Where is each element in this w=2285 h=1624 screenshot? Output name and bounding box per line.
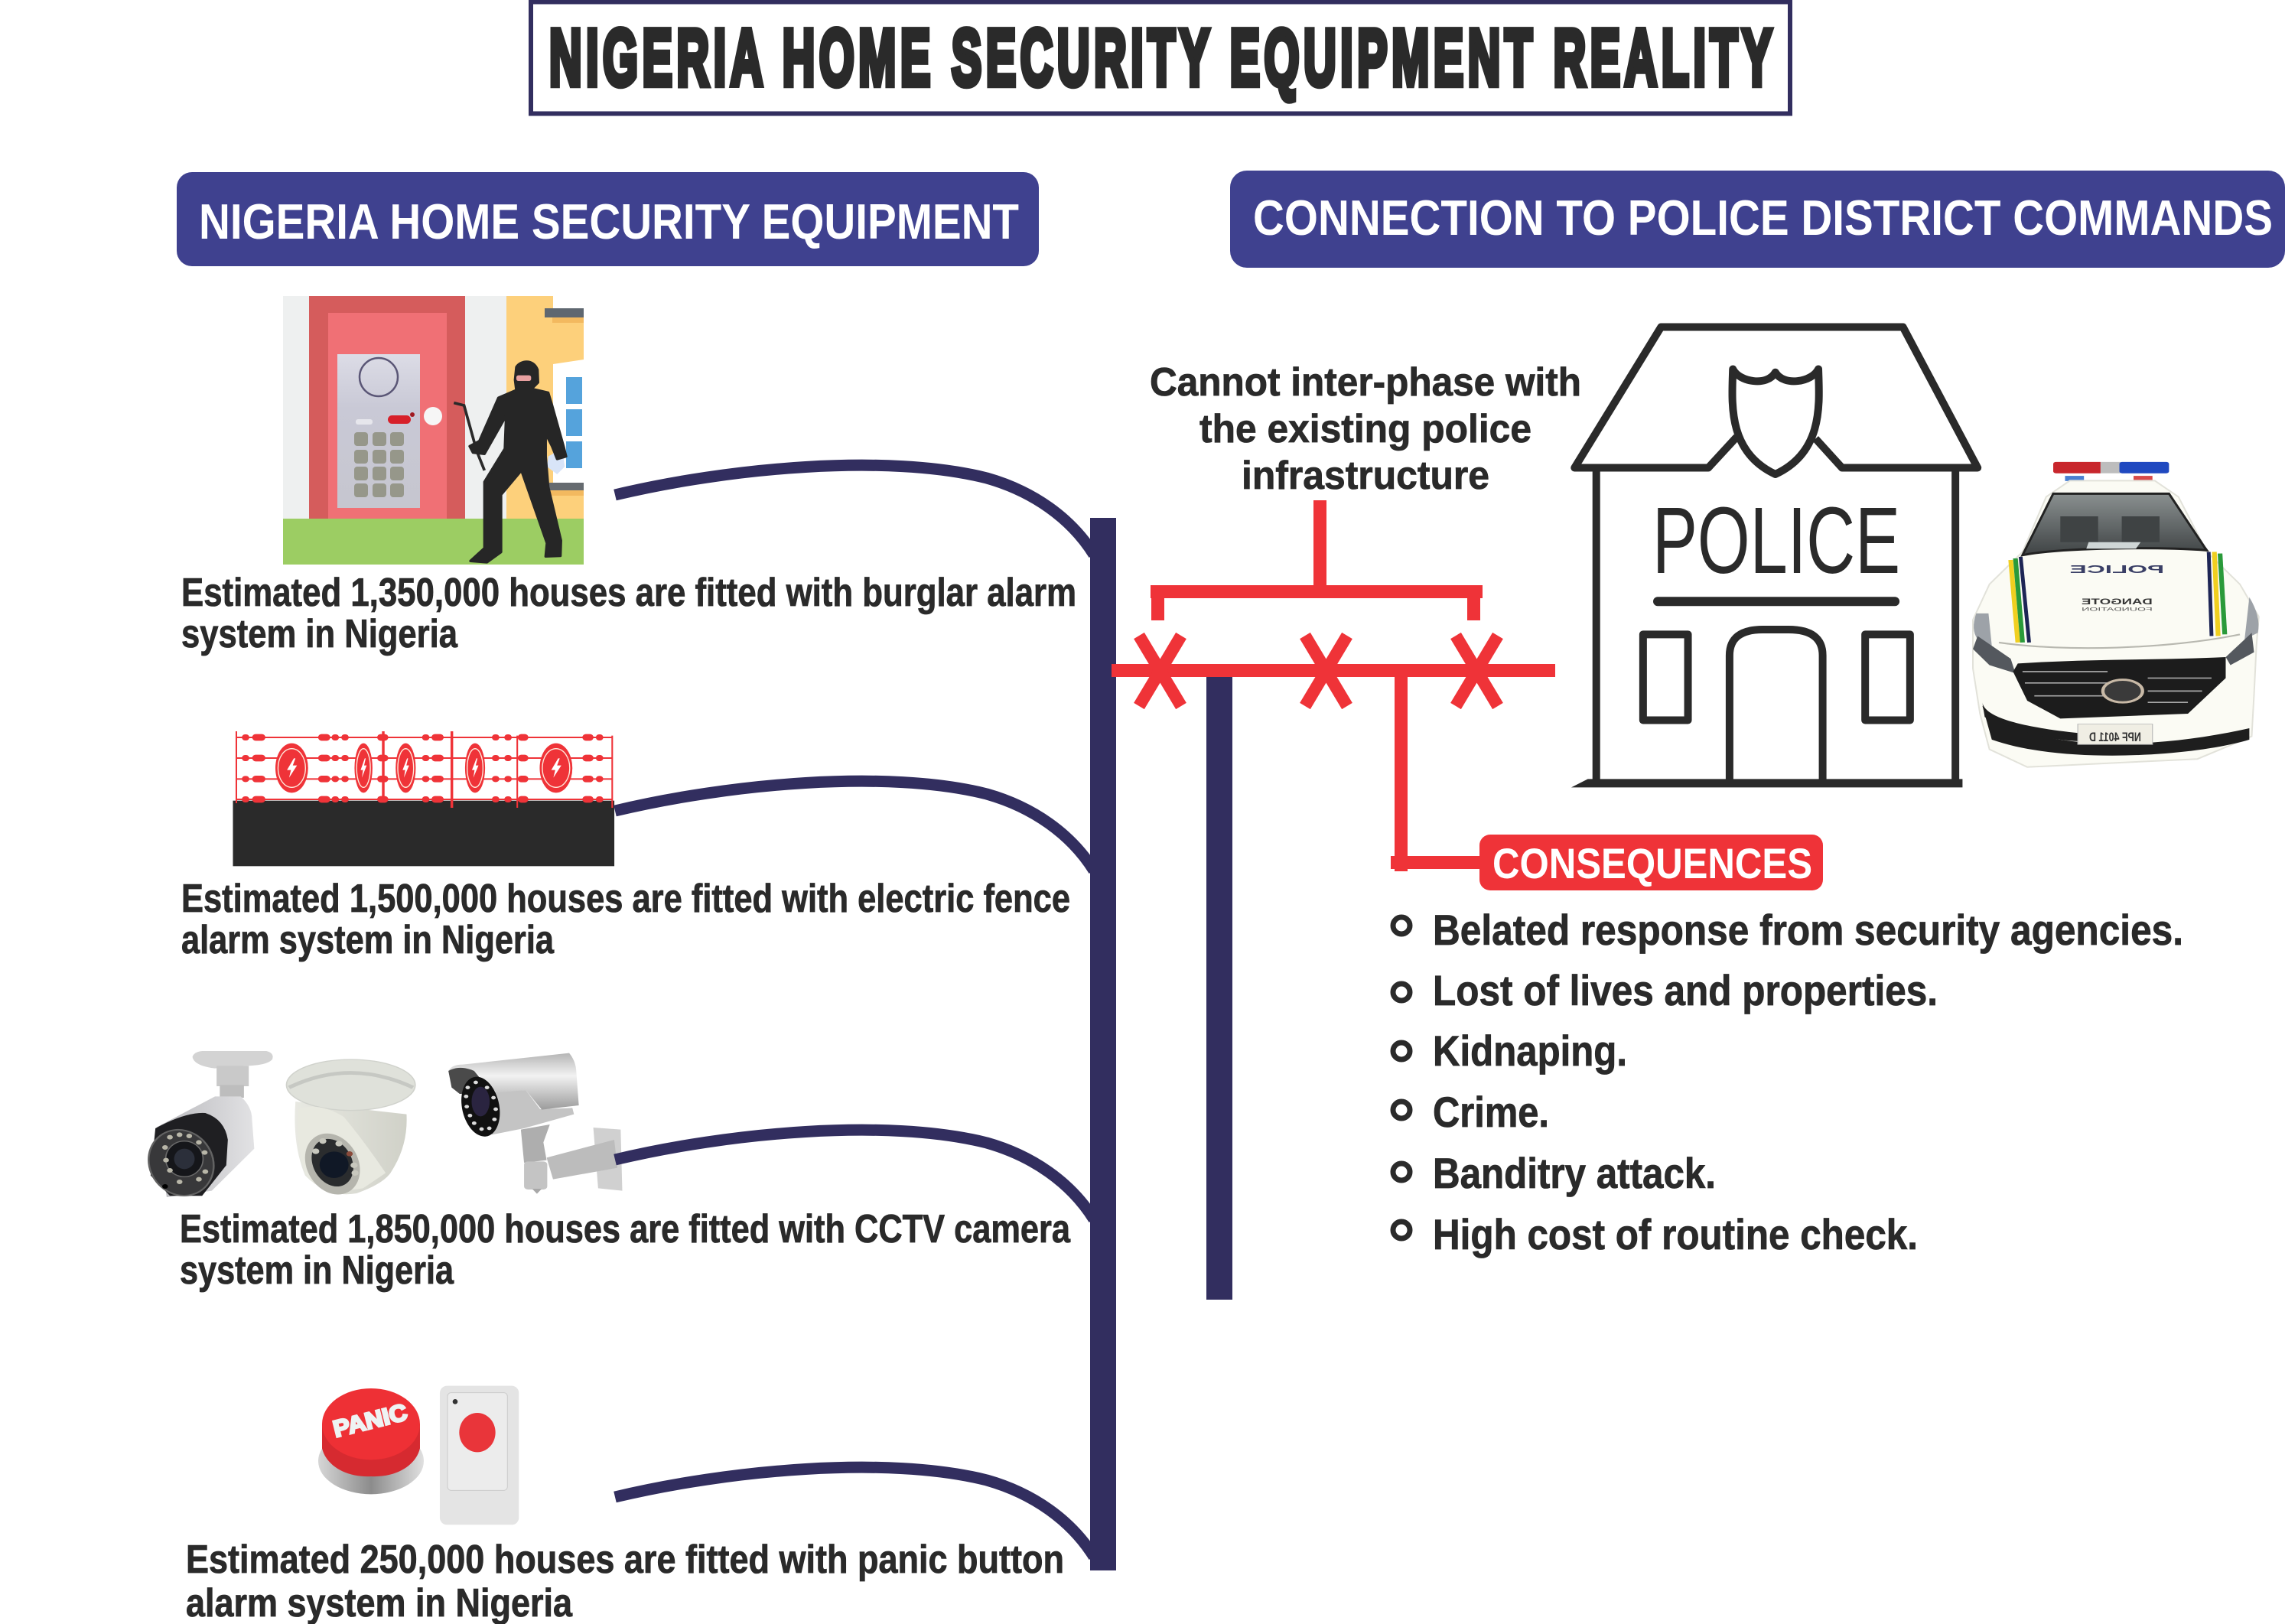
red panic button: PANIC bbox=[330, 1399, 410, 1443]
icon: police station bbox=[1571, 327, 1977, 787]
text: burglar alarm estimate bbox=[181, 571, 1076, 656]
list item 3: Kidnaping. bbox=[1433, 1027, 1627, 1075]
note: cannot inter-phase bbox=[1150, 360, 1581, 498]
intruder silhouette bbox=[454, 362, 566, 562]
bullet camera bbox=[142, 1051, 273, 1199]
list item 4: Crime. bbox=[1433, 1088, 1549, 1136]
list item 5: Banditry attack. bbox=[1433, 1149, 1716, 1197]
mirrored hood lettering: POLICE bbox=[2070, 564, 2164, 576]
connector: second navy trunk bbox=[1206, 673, 1232, 1300]
wireless panic remote bbox=[440, 1386, 519, 1525]
connector: broken red link to police bbox=[1112, 636, 1555, 706]
mirrored hood lettering: FOUNDATION bbox=[2082, 607, 2153, 612]
connector: curved lines into main trunk bbox=[615, 465, 1094, 1557]
bracket from note to link bbox=[1151, 500, 1483, 620]
list: consequences bbox=[1393, 906, 2183, 1258]
shock symbols bbox=[275, 744, 572, 792]
label: consequences: CONSEQUENCES bbox=[1492, 839, 1812, 887]
bullet camera with wall bracket bbox=[448, 1053, 622, 1194]
heading: connection to police district commands bbox=[1230, 171, 2285, 268]
illustration: electric fence bbox=[233, 731, 614, 866]
mirrored hood lettering bbox=[2070, 564, 2164, 612]
note: cannot inter-phase: infrastructure bbox=[1242, 454, 1489, 498]
illustration: CCTV cameras bbox=[142, 1051, 622, 1199]
illustration: burglar alarm and intruder bbox=[283, 296, 584, 565]
heading: Nigeria home security equipment: NIGERIA HOME SECURITY EQUIPMENT bbox=[199, 194, 1019, 249]
note: cannot inter-phase: Cannot inter-phase with bbox=[1150, 360, 1581, 405]
text: CCTV estimate: Estimated 1,850,000 houses are fitted with CCTV camera bbox=[180, 1207, 1071, 1251]
image: police car: NPF 4011 D bbox=[2089, 730, 2141, 744]
police station label: POLICE bbox=[1652, 489, 1900, 594]
dome camera bbox=[286, 1059, 415, 1199]
connector: line to consequences bbox=[1391, 677, 1484, 871]
text: electric fence estimate: Estimated 1,500,000 houses are fitted with electric fence bbox=[181, 877, 1070, 921]
list item 6: High cost of routine check. bbox=[1433, 1210, 1918, 1258]
heading: Nigeria home security equipment bbox=[177, 172, 1039, 266]
text: CCTV estimate: system in Nigeria bbox=[180, 1248, 454, 1293]
list item 1: Belated response from security agencies. bbox=[1433, 906, 2183, 954]
note: cannot inter-phase: the existing police bbox=[1199, 407, 1531, 451]
illustration: panic buttons bbox=[318, 1386, 519, 1525]
red panic button bbox=[318, 1388, 424, 1494]
title box bbox=[531, 2, 1790, 113]
text: CCTV estimate bbox=[180, 1207, 1071, 1293]
connector: main navy trunk bbox=[1090, 518, 1116, 1570]
text: electric fence estimate: alarm system in Nigeria bbox=[181, 918, 555, 962]
text: panic button estimate: Estimated 250,000 houses are fitted with panic button bbox=[186, 1538, 1064, 1582]
list item 4 bbox=[1393, 1088, 1549, 1136]
image: police car bbox=[1973, 462, 2259, 767]
text: electric fence estimate bbox=[181, 877, 1070, 962]
text: burglar alarm estimate: Estimated 1,350,000 houses are fitted with burglar alarm bbox=[181, 571, 1076, 615]
list item 2: Lost of lives and properties. bbox=[1433, 966, 1938, 1014]
alarm keypad bbox=[337, 354, 420, 508]
broken link crosses bbox=[1139, 636, 1498, 706]
text: burglar alarm estimate: system in Nigeria bbox=[181, 612, 458, 656]
text: panic button estimate bbox=[186, 1538, 1064, 1624]
mirrored hood lettering: DANGOTE bbox=[2082, 597, 2153, 607]
